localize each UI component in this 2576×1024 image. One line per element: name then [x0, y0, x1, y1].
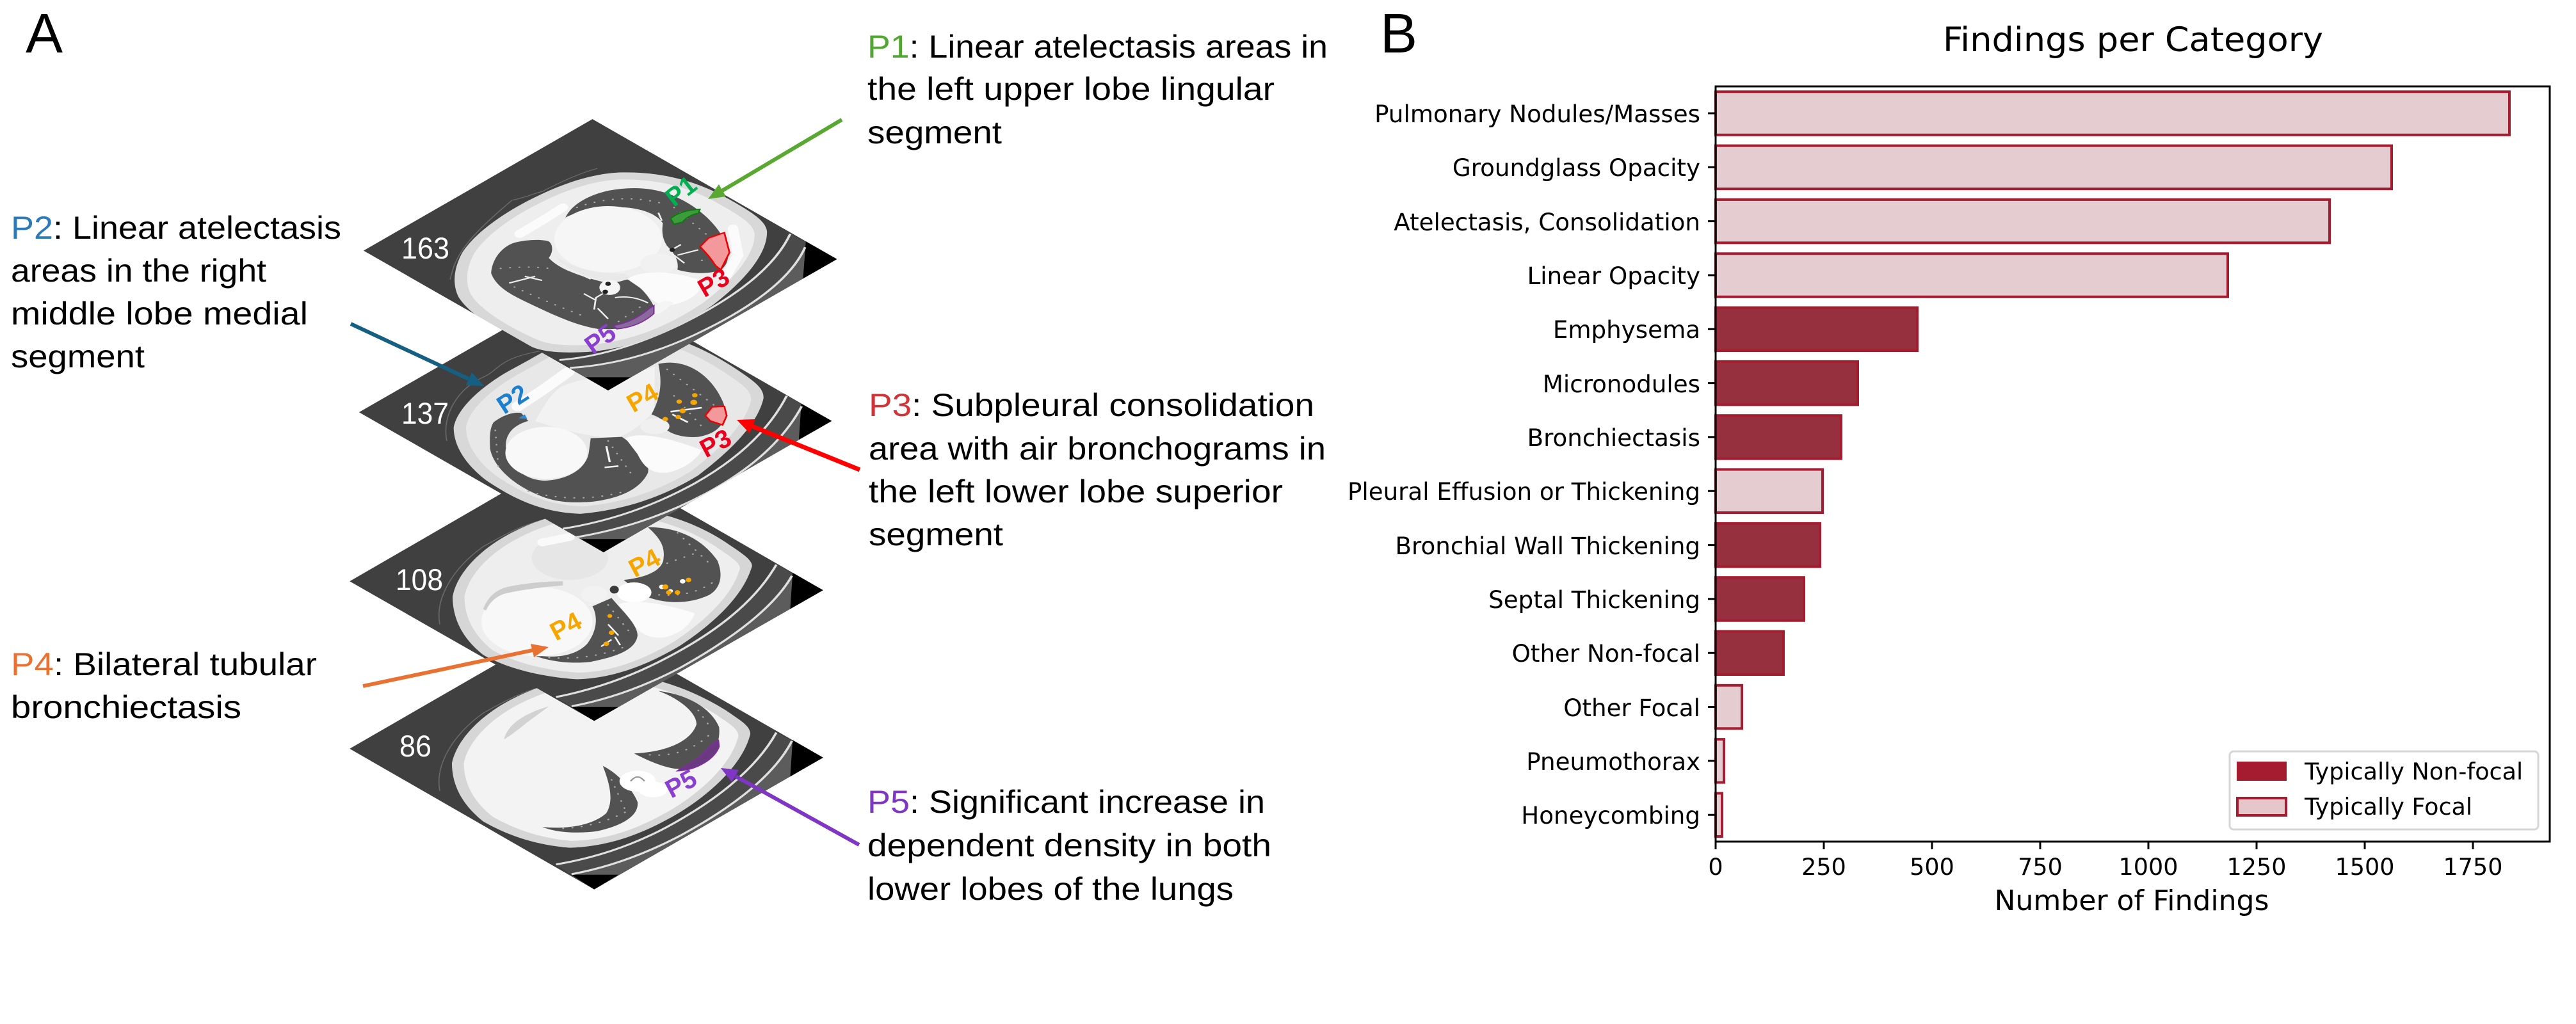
text P4: P4: Bilateral tubular: [11, 646, 317, 682]
text P2: middle lobe medial: [11, 296, 308, 332]
bars: [1716, 92, 2509, 836]
marker P5: P5: [661, 764, 702, 804]
chart title: Findings per Category: [1943, 20, 2323, 60]
slice number 163: 163: [401, 231, 449, 265]
text P3: area with air bronchograms in: [869, 431, 1326, 467]
marker P1: P1: [660, 171, 702, 212]
text P2: areas in the right: [11, 253, 266, 289]
text P2: [11, 210, 341, 374]
category labels: [1348, 100, 1700, 829]
text P5: dependent density in both: [867, 828, 1271, 863]
category labels: Bronchiectasis: [1527, 424, 1700, 452]
slice number 86: 86: [399, 729, 431, 763]
x tick labels: 1750: [2443, 853, 2502, 881]
category labels: Honeycombing: [1521, 801, 1700, 829]
bar chart: findings per category: [1348, 86, 2550, 917]
legend: Typically Non-focal: [2304, 758, 2523, 785]
category labels: Other Non-focal: [1512, 639, 1700, 668]
category labels: Septal Thickening: [1488, 586, 1700, 614]
marker P4 upper: P4: [624, 543, 666, 583]
panel A: stacked CT slices: [350, 119, 837, 890]
x tick labels: [1708, 853, 2502, 881]
text P1: the left upper lobe lingular: [867, 71, 1275, 107]
legend: Typically Focal: [2304, 793, 2472, 820]
x tick labels: 0: [1708, 853, 1723, 881]
x tick labels: 1500: [2335, 853, 2394, 881]
panel label A: A: [26, 3, 63, 65]
text P1: [867, 29, 1328, 150]
arrow P3: [737, 419, 860, 470]
x axis label: Number of Findings: [1995, 884, 2269, 917]
x tick labels: 1000: [2119, 853, 2178, 881]
text P2: segment: [11, 339, 145, 374]
marker P2: P2: [492, 379, 534, 420]
category labels: Other Focal: [1563, 694, 1700, 722]
CT slice 137: [359, 330, 832, 552]
marker P3: P3: [695, 424, 736, 463]
category labels: Groundglass Opacity: [1453, 154, 1700, 182]
x tick labels: 500: [1910, 853, 1954, 881]
arrow P1: [708, 120, 842, 199]
text P1: segment: [867, 115, 1002, 150]
slice number 108: 108: [396, 563, 443, 596]
CT slice 108: [350, 493, 823, 721]
category labels: Pulmonary Nodules/Masses: [1374, 100, 1700, 128]
category labels: Linear Opacity: [1527, 262, 1700, 290]
arrow P2: [351, 324, 484, 386]
category labels: Emphysema: [1553, 316, 1700, 344]
text P5: P5: Significant increase in: [867, 784, 1265, 820]
text P4: bronchiectasis: [11, 689, 241, 725]
arrow P4: [363, 644, 549, 686]
category labels: Bronchial Wall Thickening: [1396, 532, 1700, 560]
text P3: P3: Subpleural consolidation: [869, 387, 1314, 423]
x tick marks: [1716, 842, 2473, 849]
legend: [2230, 751, 2538, 829]
text P2: P2: Linear atelectasis: [11, 210, 341, 246]
axes frame: [1716, 86, 2550, 842]
text P1: P1: Linear atelectasis areas in: [867, 29, 1328, 65]
text P3: segment: [869, 516, 1003, 552]
text P3: [869, 387, 1326, 552]
x tick labels: 1250: [2227, 853, 2286, 881]
y tick marks: [1708, 113, 1716, 815]
category labels: Micronodules: [1543, 370, 1700, 398]
text P5: [867, 784, 1271, 907]
x tick labels: 750: [2018, 853, 2063, 881]
marker P5: P5: [579, 319, 622, 360]
text P5: lower lobes of the lungs: [867, 871, 1234, 907]
marker P4 lower: P4: [545, 607, 587, 646]
category labels: Pleural Effusion or Thickening: [1348, 477, 1700, 506]
panel label B: B: [1380, 3, 1417, 65]
slice number 137: 137: [401, 396, 449, 430]
marker P4: P4: [622, 378, 664, 418]
category labels: Atelectasis, Consolidation: [1394, 208, 1700, 236]
category labels: Pneumothorax: [1526, 748, 1700, 776]
text P4: [11, 646, 317, 725]
CT slice 163: [364, 119, 837, 390]
x tick labels: 250: [1801, 853, 1846, 881]
CT slice 86: [350, 664, 823, 890]
text P3: the left lower lobe superior: [869, 474, 1283, 509]
arrow P5: [721, 768, 859, 845]
marker P3: P3: [693, 263, 734, 303]
